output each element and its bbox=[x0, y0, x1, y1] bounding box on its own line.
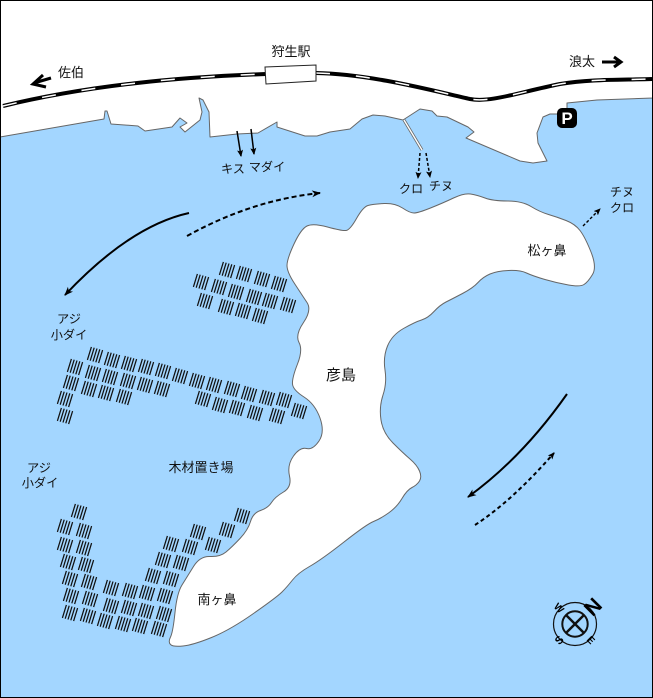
label: Minamigahana: 南ヶ鼻 bbox=[197, 592, 237, 607]
mainland north shore bbox=[0, 0, 653, 163]
arrow: current northwest solid bbox=[65, 213, 189, 295]
label: chinu and kuro: チヌ bbox=[610, 185, 634, 199]
station building bbox=[265, 65, 316, 84]
label: Matsugahana: 松ヶ鼻 bbox=[527, 243, 567, 258]
label: timber yard: 木材置き場 bbox=[168, 460, 234, 475]
arrows: casting from north shore bbox=[237, 129, 254, 156]
label: aji and kodai lower: アジ bbox=[27, 461, 51, 475]
compass: S bbox=[553, 634, 567, 648]
direction label: Saiki: 佐伯 bbox=[58, 65, 84, 80]
label: chinu and kuro: クロ bbox=[610, 201, 634, 215]
arrow: current northeast dashed bbox=[187, 193, 320, 236]
label: aji and kodai lower bbox=[22, 461, 58, 490]
label: aji and kodai upper bbox=[51, 312, 87, 342]
direction label: Namita: 浪太 bbox=[569, 54, 595, 69]
label: madai: マダイ bbox=[249, 159, 285, 174]
parking icon bbox=[557, 108, 577, 128]
arrow: to Namita bbox=[602, 57, 621, 67]
label: kuro: クロ bbox=[399, 182, 423, 196]
raft group: north bbox=[193, 262, 296, 324]
compass: W bbox=[551, 601, 566, 616]
arrow: current east dashed bbox=[475, 453, 554, 525]
label: aji and kodai lower: 小ダイ bbox=[22, 475, 58, 490]
label: Hikoshima: 彦島 bbox=[326, 367, 356, 384]
raft group: south bbox=[57, 504, 250, 637]
island: Hikoshima bbox=[169, 194, 594, 646]
label: kisu: キス bbox=[221, 162, 245, 176]
station label: 狩生駅 bbox=[271, 44, 311, 59]
arrow: to Saiki bbox=[33, 75, 51, 87]
compass bbox=[551, 594, 607, 648]
label: chinu: チヌ bbox=[429, 179, 453, 193]
label: aji and kodai upper: 小ダイ bbox=[51, 327, 87, 342]
railway line bbox=[3, 73, 652, 106]
compass: N bbox=[580, 594, 607, 621]
breakwater bbox=[404, 120, 422, 150]
label: chinu and kuro bbox=[610, 185, 634, 215]
raft group: middle bbox=[57, 347, 307, 424]
arrows: casting from breakwater bbox=[418, 153, 430, 178]
arrow: casting from Matsugahana bbox=[583, 209, 600, 226]
label: aji and kodai upper: アジ bbox=[57, 312, 81, 326]
parking icon: P bbox=[561, 109, 573, 128]
compass: E bbox=[584, 634, 597, 647]
arrow: current east solid bbox=[468, 394, 567, 497]
